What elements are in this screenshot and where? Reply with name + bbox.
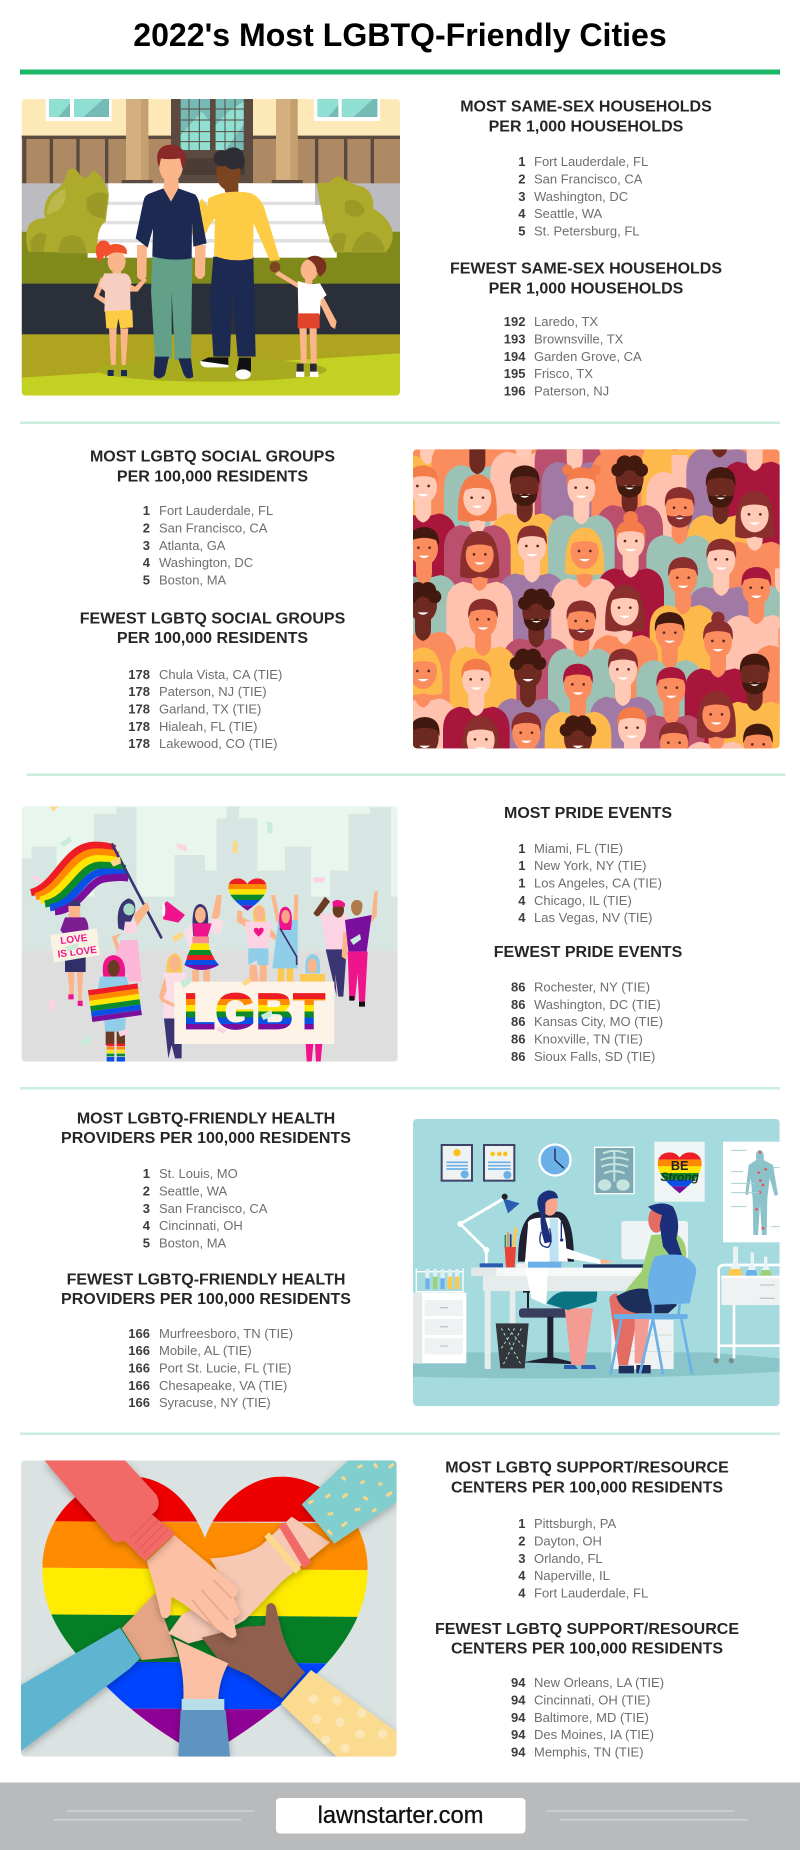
- list: most social groups: 3: [143, 538, 150, 553]
- list: fewest pride events: [511, 980, 663, 1064]
- list: fewest pride events: Rochester, NY (TIE): [534, 980, 650, 994]
- panel: social groups: [80, 449, 780, 750]
- boy: [275, 256, 337, 377]
- list: fewest same-sex households: Garden Grove, CA: [534, 349, 642, 364]
- heading: most social groups: [90, 449, 335, 485]
- list: fewest same-sex households: [504, 314, 642, 398]
- list: most pride events: [518, 841, 662, 925]
- list: fewest health providers: [128, 1326, 293, 1410]
- doctor's chair: [518, 1212, 581, 1364]
- list: fewest same-sex households: 194: [504, 349, 526, 364]
- heading: fewest health providers: FEWEST LGBTQ-FRIENDLY HEALTH: [67, 1271, 345, 1288]
- hand: pale from upper right: [168, 1517, 330, 1643]
- sleeve: teal dotted: [302, 1460, 397, 1544]
- list: most support centers: Pittsburgh, PA: [534, 1516, 616, 1531]
- list: most same-sex households: 1: [518, 154, 526, 169]
- list: fewest social groups: 178: [128, 667, 150, 682]
- person row 2: [391, 511, 800, 702]
- desk lamp: [457, 1194, 520, 1267]
- illustration: diverse crowd: [413, 449, 780, 748]
- list: most support centers: 1: [518, 1516, 526, 1531]
- list: fewest pride events: Washington, DC (TIE): [534, 997, 661, 1012]
- heading: most support centers: MOST LGBTQ SUPPORT/RESOURCE: [445, 1459, 729, 1476]
- list: fewest pride events: Knoxville, TN (TIE): [534, 1032, 643, 1046]
- blue-haired person behind banner: [300, 954, 325, 1062]
- list: fewest same-sex households: Brownsville, TX: [534, 332, 624, 346]
- list: fewest social groups: Lakewood, CO (TIE): [159, 736, 278, 751]
- list: fewest health providers: Syracuse, NY (TIE): [159, 1395, 271, 1410]
- list: fewest support centers: Memphis, TN (TIE): [534, 1744, 644, 1760]
- sleeve: yellow polka: [281, 1670, 397, 1757]
- illustration: hands on rainbow heart: [21, 1460, 397, 1758]
- panel: health providers: [61, 1110, 781, 1410]
- list: most health providers: 3: [143, 1201, 150, 1216]
- list: fewest support centers: 94: [511, 1727, 526, 1742]
- illustration: doctor's office: [413, 1119, 781, 1406]
- list: most social groups: 4: [143, 555, 151, 570]
- list: most same-sex households: Washington, DC: [534, 189, 628, 204]
- list: most social groups: San Francisco, CA: [159, 520, 268, 536]
- list: fewest support centers: New Orleans, LA (TIE): [534, 1675, 664, 1690]
- list: most same-sex households: St. Petersburg, FL: [534, 224, 640, 238]
- person row 1: [390, 455, 788, 628]
- person row 5: [413, 691, 773, 748]
- heading: fewest support centers: [435, 1621, 739, 1658]
- person in heart shirt: [237, 905, 278, 982]
- heading: most health providers: MOST LGBTQ-FRIENDLY HEALTH: [77, 1110, 335, 1127]
- list: most health providers: Seattle, WA: [159, 1184, 227, 1198]
- list: most social groups: Boston, MA: [159, 572, 227, 588]
- list: most same-sex households: San Francisco, CA: [534, 172, 643, 186]
- list: fewest social groups: Garland, TX (TIE): [159, 702, 261, 716]
- list: fewest support centers: [511, 1675, 664, 1760]
- list: fewest pride events: 86: [511, 1032, 526, 1046]
- list: fewest health providers: 166: [128, 1343, 150, 1358]
- list: most health providers: St. Louis, MO: [159, 1166, 238, 1181]
- list: most pride events: Miami, FL (TIE): [534, 841, 623, 856]
- list: most pride events: Chicago, IL (TIE): [534, 893, 632, 908]
- rainbow flag: [31, 845, 128, 912]
- patient: [609, 1203, 696, 1374]
- desk: [471, 1268, 674, 1369]
- heading: fewest same-sex households: FEWEST SAME-SEX HOUSEHOLDS: [450, 260, 722, 277]
- list: most pride events: 1: [518, 841, 526, 856]
- list: most support centers: 4: [518, 1568, 526, 1583]
- heading: fewest pride events: FEWEST PRIDE EVENTS: [494, 944, 683, 961]
- list: fewest health providers: Murfreesboro, TN (TIE): [159, 1326, 293, 1341]
- list: fewest social groups: 178: [128, 719, 150, 734]
- list: most social groups: 5: [143, 572, 150, 588]
- illustration: pride parade: [22, 806, 398, 1062]
- list: most same-sex households: Fort Lauderdale, FL: [534, 154, 648, 169]
- person with love is love sign: IS LOVE: [57, 945, 98, 961]
- list: most health providers: 5: [143, 1236, 150, 1250]
- filing cabinet: [413, 1293, 466, 1363]
- list: fewest same-sex households: 192: [504, 314, 526, 329]
- list: fewest pride events: 86: [511, 997, 526, 1012]
- list: most social groups: [143, 503, 273, 588]
- list: most support centers: 2: [518, 1534, 526, 1548]
- confetti: [32, 807, 361, 1046]
- heading: fewest same-sex households: PER 1,000 HOUSEHOLDS: [489, 280, 684, 297]
- panel: support centers: [21, 1459, 739, 1760]
- heading: fewest health providers: PROVIDERS PER 100,000 RESIDENTS: [61, 1291, 351, 1308]
- list: most pride events: Los Angeles, CA (TIE): [534, 876, 662, 890]
- person in blue dress: [271, 894, 298, 982]
- list: fewest support centers: Des Moines, IA (TIE): [534, 1727, 654, 1742]
- list: fewest pride events: 86: [511, 1049, 526, 1064]
- heading: most social groups: MOST LGBTQ SOCIAL GROUPS: [90, 449, 335, 466]
- heading: fewest support centers: FEWEST LGBTQ SUPPORT/RESOURCE: [435, 1621, 739, 1638]
- list: most support centers: [518, 1516, 648, 1600]
- illustration: family in front of house: [22, 99, 400, 396]
- list: most social groups: 1: [143, 503, 150, 518]
- heading: most social groups: PER 100,000 RESIDENTS: [117, 468, 308, 485]
- heading: most support centers: [445, 1459, 729, 1496]
- hand: top: [147, 1535, 240, 1638]
- list: most health providers: Cincinnati, OH: [159, 1218, 243, 1233]
- wall clock: [538, 1143, 572, 1177]
- list: most social groups: Atlanta, GA: [159, 538, 226, 553]
- list: fewest pride events: 86: [511, 980, 526, 994]
- sleeve: coral: [44, 1460, 175, 1561]
- heading: fewest social groups: FEWEST LGBTQ SOCIAL GROUPS: [80, 610, 346, 627]
- list: fewest health providers: Port St. Lucie, FL (TIE): [159, 1360, 291, 1376]
- list: most health providers: 2: [143, 1184, 150, 1198]
- list: most support centers: Orlando, FL: [534, 1551, 603, 1566]
- list: most support centers: Fort Lauderdale, FL: [534, 1586, 648, 1600]
- list: fewest pride events: Sioux Falls, SD (TIE): [534, 1049, 655, 1064]
- hand: brown: [202, 1603, 305, 1698]
- list: most health providers: 4: [143, 1218, 151, 1233]
- person with love is love sign: LOVE: [60, 933, 88, 947]
- footer logo box: lawnstarter.com: [318, 1803, 483, 1829]
- heading: fewest social groups: [80, 610, 346, 647]
- list: fewest support centers: Cincinnati, OH (TIE): [534, 1692, 650, 1708]
- title: 2022's Most LGBTQ-Friendly Cities: [133, 17, 667, 53]
- list: fewest health providers: 166: [128, 1326, 150, 1341]
- rainbow heart: [38, 1475, 372, 1758]
- list: fewest same-sex households: 196: [504, 384, 526, 398]
- woman in pink coat: [159, 953, 187, 1058]
- list: fewest support centers: 94: [511, 1675, 526, 1690]
- heading: most support centers: CENTERS PER 100,000 RESIDENTS: [451, 1479, 723, 1496]
- two people with raised arms: [313, 891, 378, 1007]
- list: most pride events: 1: [518, 876, 526, 890]
- list: most same-sex households: 5: [518, 224, 526, 238]
- list: fewest support centers: 94: [511, 1692, 526, 1708]
- woman with crop top: [112, 898, 150, 982]
- right bush: [317, 177, 393, 252]
- list: most social groups: Washington, DC: [159, 555, 253, 570]
- list: fewest same-sex households: Frisco, TX: [534, 366, 593, 381]
- hand: tan: [122, 1593, 178, 1660]
- list: fewest health providers: Mobile, AL (TIE): [159, 1343, 252, 1358]
- heading: most same-sex households: PER 1,000 HOUSEHOLDS: [489, 118, 684, 135]
- list: fewest social groups: 178: [128, 702, 150, 716]
- list: fewest social groups: 178: [128, 684, 150, 699]
- list: most pride events: 4: [518, 893, 526, 908]
- monitor: [621, 1221, 688, 1259]
- sleeve: light blue: [21, 1628, 140, 1751]
- footer logo box: [276, 1798, 526, 1834]
- list: most support centers: Dayton, OH: [534, 1534, 602, 1548]
- list: most health providers: San Francisco, CA: [159, 1201, 268, 1216]
- list: most same-sex households: Seattle, WA: [534, 206, 602, 221]
- test tubes: [416, 1268, 463, 1292]
- person row 4: [413, 648, 780, 748]
- be strong poster: BE: [671, 1159, 688, 1173]
- list: most social groups: 2: [143, 520, 150, 536]
- x-ray: [594, 1147, 635, 1194]
- list: most support centers: 3: [518, 1551, 526, 1566]
- list: fewest health providers: 166: [128, 1360, 150, 1376]
- pencil cup: [505, 1228, 516, 1267]
- list: most health providers: [143, 1166, 268, 1250]
- anatomy chart: [723, 1142, 781, 1242]
- list: most pride events: 1: [518, 858, 526, 873]
- man in yellow sweater: [188, 147, 280, 379]
- list: most same-sex households: 3: [518, 189, 526, 204]
- rainbow heart: [228, 878, 267, 911]
- heading: fewest social groups: PER 100,000 RESIDENTS: [117, 630, 308, 647]
- list: fewest social groups: Paterson, NJ (TIE): [159, 684, 267, 699]
- list: fewest support centers: 94: [511, 1710, 526, 1725]
- list: fewest health providers: 166: [128, 1395, 150, 1410]
- list: fewest social groups: [128, 667, 282, 751]
- list: fewest support centers: 94: [511, 1744, 526, 1760]
- list: most pride events: New York, NY (TIE): [534, 858, 646, 873]
- panel: same-sex households: [22, 99, 722, 398]
- list: most health providers: 1: [143, 1166, 150, 1181]
- list: fewest social groups: Hialeah, FL (TIE): [159, 719, 258, 734]
- list: fewest social groups: 178: [128, 736, 150, 751]
- panel: pride events: [22, 805, 683, 1064]
- list: fewest same-sex households: Laredo, TX: [534, 314, 598, 329]
- list: most support centers: Naperville, IL: [534, 1568, 610, 1583]
- waste bin: [496, 1323, 529, 1368]
- list: most social groups: Fort Lauderdale, FL: [159, 503, 273, 518]
- person with megaphone: [162, 895, 224, 982]
- left bush: [26, 169, 109, 253]
- footer: [0, 1782, 800, 1850]
- person with love is love sign: [50, 900, 100, 1006]
- heading: fewest support centers: CENTERS PER 100,000 RESIDENTS: [451, 1641, 723, 1658]
- list: most health providers: Boston, MA: [159, 1236, 227, 1250]
- list: fewest health providers: Chesapeake, VA (TIE): [159, 1378, 287, 1393]
- person row 3: [413, 582, 780, 748]
- heading: most health providers: PROVIDERS PER 100,000 RESIDENTS: [61, 1130, 351, 1147]
- be strong poster: Strong: [660, 1170, 700, 1184]
- heading: fewest health providers: [61, 1271, 351, 1308]
- LGBT banner: LGBT: [183, 984, 325, 1040]
- list: fewest support centers: Baltimore, MD (TIE): [534, 1710, 649, 1725]
- list: most same-sex households: 2: [518, 172, 526, 186]
- girl: [94, 240, 147, 376]
- lab cart with flasks: [714, 1247, 780, 1363]
- man in navy shirt: [136, 145, 207, 379]
- heading: most health providers: [61, 1110, 351, 1147]
- list: most same-sex households: 4: [518, 206, 526, 221]
- bottom arm: [173, 1638, 230, 1757]
- list: fewest same-sex households: Paterson, NJ: [534, 384, 609, 398]
- heading: most pride events: MOST PRIDE EVENTS: [504, 805, 672, 822]
- be strong poster: [654, 1142, 705, 1202]
- list: fewest same-sex households: 195: [504, 366, 526, 381]
- certificates: [441, 1144, 515, 1182]
- list: fewest same-sex households: 193: [504, 332, 526, 346]
- list: fewest health providers: 166: [128, 1378, 150, 1393]
- list: most pride events: Las Vegas, NV (TIE): [534, 910, 652, 925]
- list: most support centers: 4: [518, 1586, 526, 1600]
- heading: most same-sex households: MOST SAME-SEX HOUSEHOLDS: [460, 99, 712, 116]
- doctor: [516, 1190, 644, 1369]
- list: most pride events: 4: [518, 910, 526, 925]
- list: fewest pride events: Kansas City, MO (TIE): [534, 1014, 663, 1029]
- list: fewest pride events: 86: [511, 1014, 526, 1029]
- title underline: [20, 70, 780, 74]
- list: fewest social groups: Chula Vista, CA (TIE): [159, 667, 282, 682]
- person holding rainbow sign: [88, 955, 142, 1062]
- list: most same-sex households: [518, 154, 648, 238]
- heading: most same-sex households: [460, 99, 712, 135]
- heading: fewest same-sex households: [450, 260, 722, 297]
